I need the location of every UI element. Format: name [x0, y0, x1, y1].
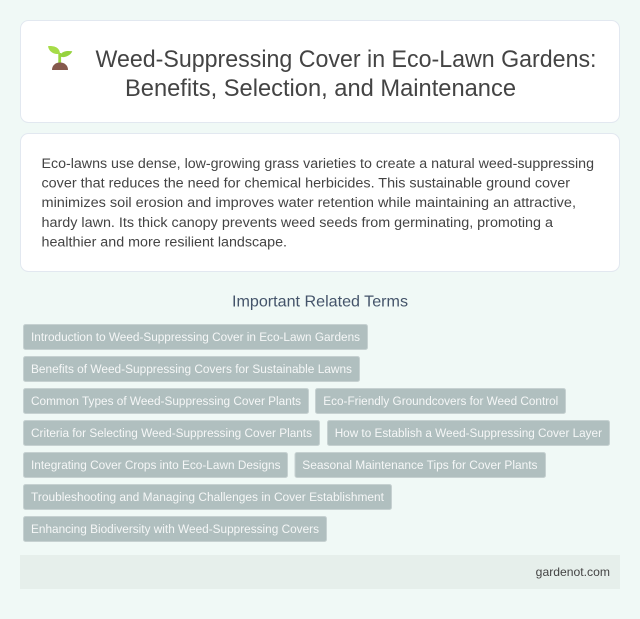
tag: eco-friendly groundcovers	[316, 388, 566, 414]
tag: integrating cover crops: Integrating Cover Crops into Eco-Lawn Designs	[31, 458, 280, 472]
title: Benefits, Selection, and Maintenance	[125, 75, 516, 102]
tag: establish layer	[328, 420, 610, 446]
text block: description: hardy lawn. Its thick canopy prevents weed seeds from germinating, promoting a	[42, 215, 553, 231]
icon: seedling	[48, 46, 72, 70]
text block: description: healthier and more resilient landscape.	[42, 234, 287, 250]
tag: common types: Common Types of Weed-Suppressing Cover Plants	[31, 394, 301, 408]
tag: selection criteria	[24, 420, 320, 446]
text block: description: cover that reduces the need for chemical herbicides. This sustainable ground cover	[42, 176, 570, 192]
tag: seasonal maintenance: Seasonal Maintenance Tips for Cover Plants	[302, 458, 538, 472]
footer: gardenot.com	[536, 565, 610, 579]
footer	[20, 555, 620, 589]
tag: common types	[24, 388, 308, 414]
tag: troubleshooting	[24, 484, 392, 510]
tag: establish layer: How to Establish a Weed-Suppressing Cover Layer	[335, 426, 602, 440]
tag: benefits	[24, 356, 360, 382]
tag: seasonal maintenance	[295, 452, 546, 478]
tag: troubleshooting: Troubleshooting and Managing Challenges in Cover Establishment	[31, 490, 385, 504]
text block: description: Eco-lawns use dense, low-growing grass varieties to create a natural weed-suppressing	[42, 156, 594, 172]
tag: biodiversity: Enhancing Biodiversity with Weed-Suppressing Covers	[31, 522, 319, 536]
tag: integrating cover crops	[24, 452, 288, 478]
panel: term tags	[24, 324, 610, 542]
heading: related terms: Important Related Terms	[232, 294, 408, 310]
tag: introduction: Introduction to Weed-Suppressing Cover in Eco-Lawn Gardens	[31, 330, 360, 344]
panel: title card	[20, 20, 620, 122]
title: Weed-Suppressing Cover in Eco-Lawn Gardens:	[96, 46, 596, 73]
title	[96, 46, 596, 102]
text block: description	[42, 156, 594, 250]
tag: selection criteria: Criteria for Selecting Weed-Suppressing Cover Plants	[31, 426, 312, 440]
text block: description: minimizes soil erosion and improves water retention while maintaining an attractive,	[42, 195, 576, 211]
tag: biodiversity	[24, 516, 326, 542]
tag: eco-friendly groundcovers: Eco-Friendly Groundcovers for Weed Control	[323, 394, 558, 408]
tag: introduction	[24, 324, 368, 350]
tag: benefits: Benefits of Weed-Suppressing Covers for Sustainable Lawns	[31, 362, 352, 376]
panel: description card	[20, 134, 620, 272]
